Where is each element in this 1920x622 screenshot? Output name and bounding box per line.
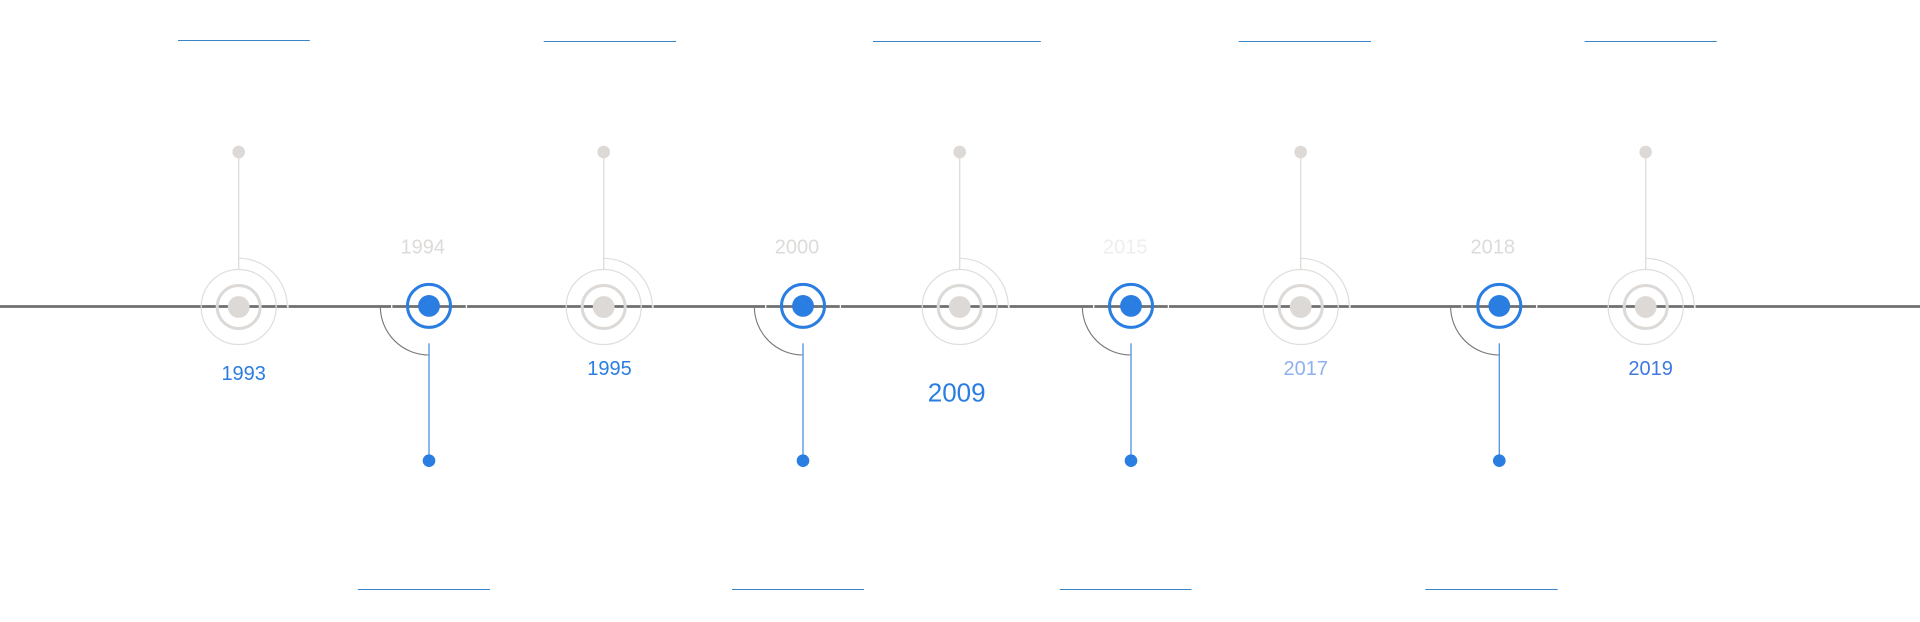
year label: 1995: 1995 — [587, 358, 632, 380]
year label: 2015: 2015 — [1103, 236, 1148, 258]
year label: 2018: 2018 — [1471, 236, 1515, 258]
top underline: 1995 — [544, 40, 676, 42]
year label: 1994: 1994 — [401, 236, 445, 258]
node: 2009 — [922, 146, 1009, 344]
node: 2019 — [1608, 146, 1695, 344]
top underline: 2017 — [1239, 40, 1371, 42]
node: 1994 — [380, 284, 466, 467]
bottom underline: 1994 — [358, 588, 490, 590]
node: 1993 — [201, 146, 288, 344]
node: 2000 — [754, 284, 840, 467]
node: 2018 — [1451, 284, 1537, 467]
top underline: 2019 — [1585, 40, 1717, 42]
top underline: 1993 — [178, 40, 310, 42]
year label: 2019: 2019 — [1628, 358, 1673, 380]
year label: 2000: 2000 — [775, 236, 819, 258]
year label: 2009: 2009 — [928, 378, 986, 408]
bottom underline: 2018 — [1425, 588, 1558, 590]
node: 2017 — [1263, 146, 1350, 344]
bottom underline: 2000 — [732, 588, 864, 590]
top underline: 2009 — [873, 40, 1041, 42]
main horizontal axis — [0, 305, 1920, 308]
year label: 1993: 1993 — [221, 363, 266, 385]
year label: 2017: 2017 — [1284, 358, 1328, 380]
bottom underline: 2015 — [1060, 588, 1192, 590]
node: 2015 — [1082, 284, 1168, 467]
node: 1995 — [566, 146, 653, 344]
